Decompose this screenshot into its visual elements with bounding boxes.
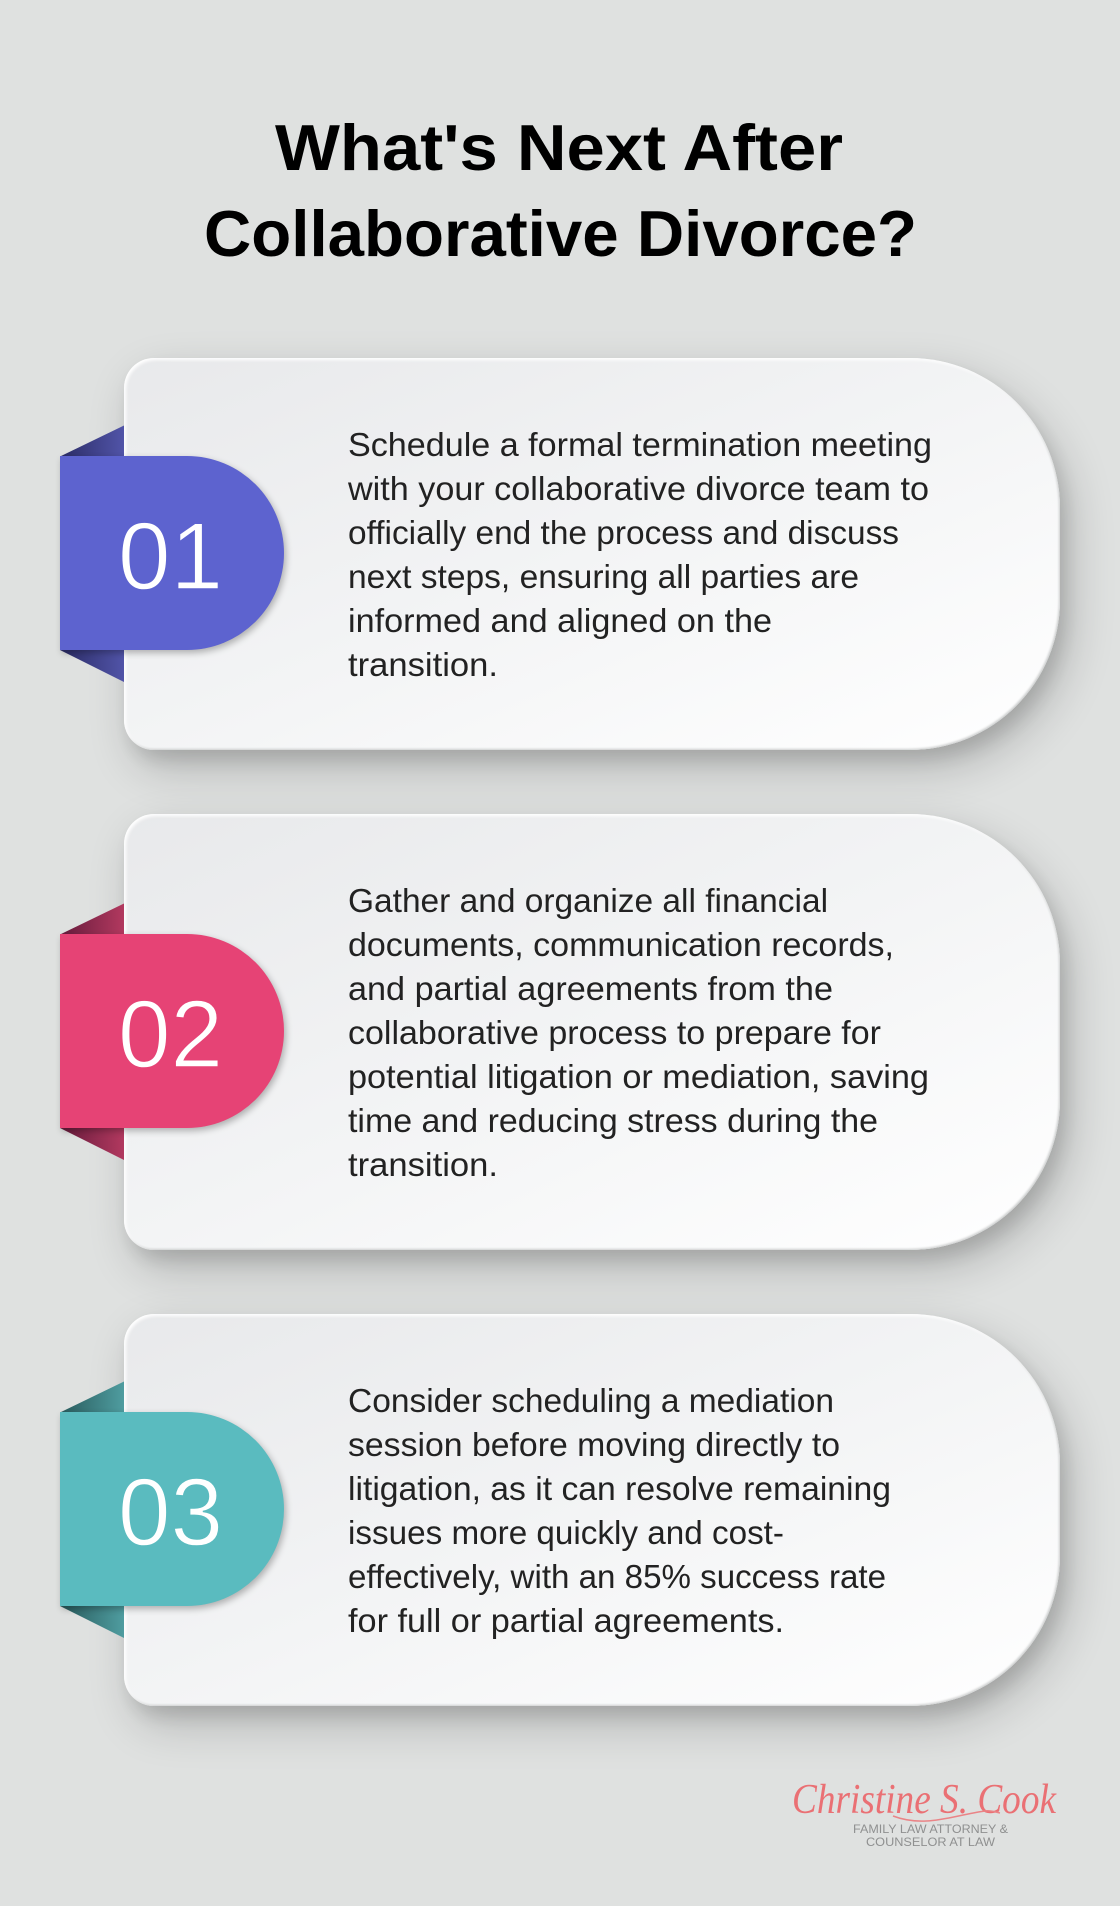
step 01 text: officially end the process and discuss (348, 514, 899, 551)
card background 01 (124, 358, 1060, 750)
step 03 text: for full or partial agreements. (348, 1602, 784, 1639)
step 03 text (348, 1382, 891, 1639)
card background 03 (124, 1314, 1060, 1706)
panel: step 02 (58, 811, 1090, 1288)
step 02 text (348, 882, 929, 1183)
ribbon fold top 02 (61, 904, 124, 934)
panel: step 01 (58, 354, 1090, 788)
panel: step 03 (58, 1311, 1090, 1744)
step 03 text: effectively, with an 85% success rate (348, 1558, 886, 1595)
number 02: 02 (118, 981, 223, 1088)
step 02 text: potential litigation or mediation, saving (348, 1058, 929, 1095)
step 01 text: Schedule a formal termination meeting (348, 426, 932, 463)
number tab 01 (60, 456, 284, 650)
step 01 text: with your collaborative divorce team to (347, 470, 929, 507)
ribbon fold bottom 03 (60, 1606, 124, 1638)
step 01 text: transition. (348, 646, 498, 683)
step 02 text: Gather and organize all financial (348, 882, 828, 919)
number 03: 03 (118, 1459, 223, 1566)
number tab 02 (60, 934, 284, 1128)
card background 02 (124, 814, 1060, 1250)
ribbon fold top 03 (61, 1382, 124, 1412)
step 03 text: session before moving directly to (348, 1426, 840, 1463)
step 03 text: issues more quickly and cost- (348, 1514, 784, 1551)
logo: Christine S. Cook: FAMILY LAW ATTORNEY & (853, 1824, 1008, 1836)
step 03 text: Consider scheduling a mediation (348, 1382, 834, 1419)
step 01 text: informed and aligned on the (348, 602, 772, 639)
step 02 text: time and reducing stress during the (348, 1102, 878, 1139)
step 02 text: transition. (348, 1146, 498, 1183)
title (204, 111, 917, 270)
logo: Christine S. Cook: Christine S. Cook (792, 1777, 1057, 1823)
ribbon fold bottom 02 (60, 1128, 124, 1160)
ribbon fold top 01 (61, 426, 124, 456)
title: Collaborative Divorce? (204, 197, 917, 270)
number 01: 01 (118, 503, 223, 610)
step 03 text: litigation, as it can resolve remaining (348, 1470, 891, 1507)
step 02 text: documents, communication records, (348, 926, 894, 963)
logo: Christine S. Cook: COUNSELOR AT LAW (866, 1837, 995, 1849)
step 01 text (347, 426, 932, 683)
number tab 03 (60, 1412, 284, 1606)
step 01 text: next steps, ensuring all parties are (348, 558, 859, 595)
title: What's Next After (275, 111, 843, 184)
ribbon fold bottom 01 (60, 650, 124, 682)
step 02 text: and partial agreements from the (348, 970, 833, 1007)
step 02 text: collaborative process to prepare for (348, 1014, 881, 1051)
